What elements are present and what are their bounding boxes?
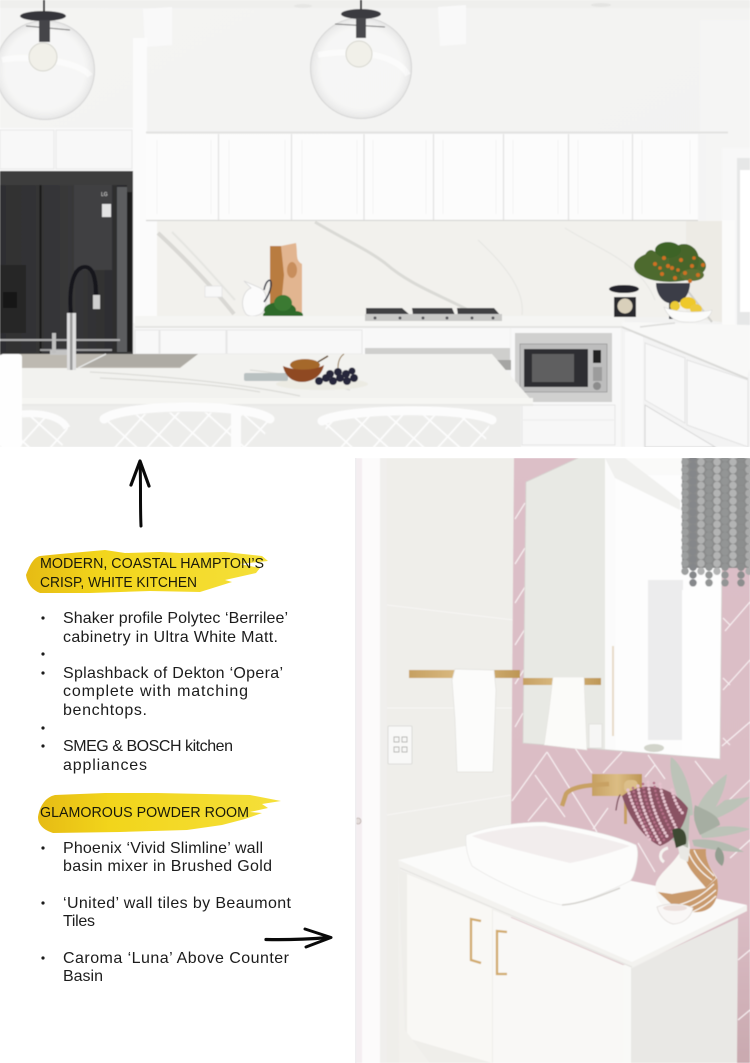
powder room bullet list: Basin — [63, 968, 103, 985]
corner cabinets and benchtop — [622, 322, 750, 447]
power outlet — [205, 286, 222, 297]
heading: powder room on yellow brush stroke: GLAMOROUS POWDER ROOM — [40, 805, 249, 821]
small dish — [657, 904, 693, 924]
kitchen bullet list — [41, 610, 288, 774]
plate with bowl, pears and grapes — [244, 354, 368, 390]
pink herringbone wall tiles — [511, 458, 750, 1063]
gold towel rail with towel — [409, 669, 601, 772]
heading: kitchen on yellow brush stroke — [26, 550, 268, 593]
kitchen bullet list: complete with matching — [63, 683, 248, 700]
powder room bullet list: ‘United’ wall tiles by Beaumont — [63, 895, 292, 912]
window and right wall trim — [722, 148, 750, 326]
beaded grey chandelier — [682, 458, 750, 590]
chopping boards — [270, 243, 302, 316]
kitchen bullet list: appliances — [63, 757, 147, 774]
kitchen bullet list: cabinetry in Ultra White Matt. — [63, 629, 278, 646]
wall mirror — [520, 458, 725, 765]
powder room bullet list: basin mixer in Brushed Gold — [63, 858, 272, 875]
off-white wall tiles — [387, 458, 515, 1063]
gas cooktop — [365, 308, 502, 321]
white strip beside photo — [355, 458, 356, 1063]
parsley — [263, 295, 303, 319]
fridge: LG — [101, 192, 108, 198]
panel: powder room text — [38, 793, 292, 985]
orange berry plant in pot — [634, 242, 706, 319]
photo: white Hampton's kitchen — [0, 0, 750, 447]
kitchen bullet list: SMEG & BOSCH kitchen — [63, 738, 233, 755]
heading: kitchen on yellow brush stroke: CRISP, WHITE KITCHEN — [40, 575, 197, 591]
vanity benchtop — [398, 846, 747, 968]
photo: pink powder room — [355, 458, 750, 1063]
panel: kitchen arrow pointing up — [131, 461, 149, 526]
benchtop and base cabinets, back wall — [135, 315, 622, 370]
fridge — [0, 171, 133, 355]
left wall cabinets above fridge — [0, 130, 1, 169]
silver foliage — [670, 757, 750, 866]
door frame — [356, 458, 380, 1062]
panel: powder room arrow pointing right — [266, 929, 331, 947]
marble splashback — [157, 221, 727, 323]
foreground white post — [0, 354, 22, 447]
rattan bar stools — [22, 407, 492, 447]
drawer below microwave — [522, 405, 615, 445]
pink native flowers — [616, 782, 688, 848]
brushed gold wall mixer — [562, 774, 642, 824]
powder room bullet list: Phoenix ‘Vivid Slimline’ wall — [63, 840, 263, 857]
heading: powder room on yellow brush stroke — [38, 793, 281, 833]
microwave — [515, 333, 612, 402]
light switches — [388, 724, 602, 764]
upper shaker cabinets — [146, 132, 728, 221]
mixer tap — [50, 267, 100, 370]
right glass pendant light — [310, 0, 412, 119]
kitchen scale — [609, 285, 639, 317]
left glass pendant light — [0, 0, 95, 120]
kitchen bullet list: Shaker profile Polytec ‘Berrilee’ — [63, 610, 288, 627]
heading: kitchen on yellow brush stroke: MODERN, COASTAL HAMPTON’S — [40, 556, 264, 572]
vanity cabinet — [398, 860, 738, 1063]
kitchen bullet list: Splashback of Dekton ‘Opera’ — [63, 665, 283, 682]
panel: kitchen text — [26, 550, 288, 774]
powder room bullet list — [41, 840, 292, 985]
ceiling downlights — [170, 4, 610, 8]
powder room bullet list: Caroma ‘Luna’ Above Counter — [63, 950, 290, 967]
bowl of lemons — [664, 297, 712, 322]
white above-counter basin — [466, 822, 638, 905]
column between fridge and cabinets — [133, 38, 147, 323]
kitchen bullet list: benchtops. — [63, 702, 147, 719]
striped ceramic vase — [655, 840, 718, 913]
powder room bullet list: Tiles — [63, 913, 95, 930]
gold cabinet handles — [471, 919, 507, 974]
white jug — [243, 280, 271, 316]
marble island bench with sink — [20, 354, 533, 447]
